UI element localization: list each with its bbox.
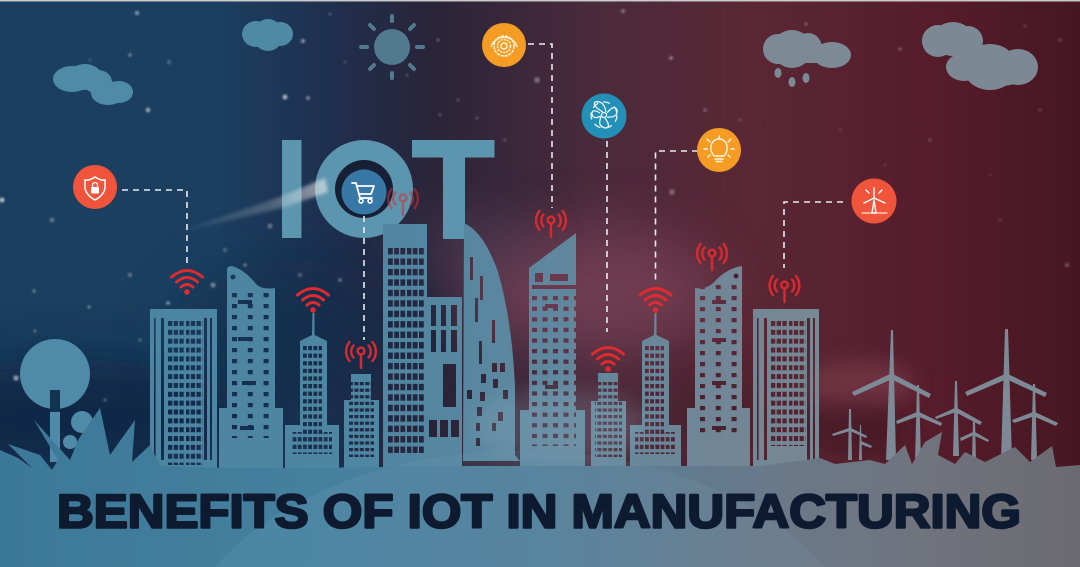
icon: wind turbine <box>852 178 896 224</box>
turbine 4 middle <box>935 381 989 462</box>
turbine hole on building 10 <box>734 274 738 278</box>
antenna above building 7 <box>536 211 566 237</box>
cloud: far left <box>53 64 133 105</box>
building 2 roof hole <box>230 274 236 280</box>
icon: shopping cart <box>342 170 386 214</box>
dashed connector lines <box>122 44 843 340</box>
wifi above tower 9 <box>640 288 671 313</box>
wifi above tower 3 <box>298 288 328 313</box>
skyline <box>150 223 819 468</box>
cloud: upper centre-left <box>242 19 293 51</box>
turbine 3 small left <box>832 409 872 460</box>
building 11 <box>753 309 819 466</box>
wind turbines <box>832 329 1058 462</box>
ground <box>0 408 1080 567</box>
turbine 2 <box>896 385 942 462</box>
icon: fan <box>582 94 626 138</box>
wifi above small tower 8 <box>592 348 624 372</box>
cloud: rain <box>763 30 851 87</box>
icon: security shield <box>73 165 117 209</box>
clouds and sun <box>53 16 1038 105</box>
building 5 <box>383 224 462 468</box>
icon: orange gear dial <box>482 23 526 67</box>
hill arc <box>215 451 825 567</box>
building 2 curved <box>219 266 283 468</box>
stars <box>0 9 1069 402</box>
building 6 curved tall <box>463 223 520 461</box>
title: BENEFITS OF IOT IN MANUFACTURING <box>57 485 1021 538</box>
antenna above building 11 <box>770 276 799 302</box>
antenna above building 5 <box>388 189 418 215</box>
IOT large letters <box>282 140 494 239</box>
roof holes <box>230 274 738 280</box>
turbine 5 large right <box>965 329 1058 460</box>
signal icons <box>172 189 799 372</box>
cloud: large right <box>922 22 1038 90</box>
wifi above building 1 <box>172 270 202 295</box>
small tower 4 <box>344 374 379 468</box>
building 10 curved <box>687 266 750 466</box>
small tower 8 <box>591 373 626 466</box>
tower 9 <box>630 313 681 466</box>
icon: sun <box>361 16 423 78</box>
tower 3 <box>285 313 339 468</box>
turbine 1 large <box>852 330 931 460</box>
antenna above small tower 4 <box>346 342 376 368</box>
icon: light bulb <box>697 128 741 172</box>
comet streak <box>165 178 328 236</box>
building 1 <box>150 309 217 468</box>
icon: tree <box>20 339 93 462</box>
building 7 <box>520 233 585 466</box>
fog over lower skyline <box>470 389 650 461</box>
antenna above building 10 <box>697 244 727 270</box>
